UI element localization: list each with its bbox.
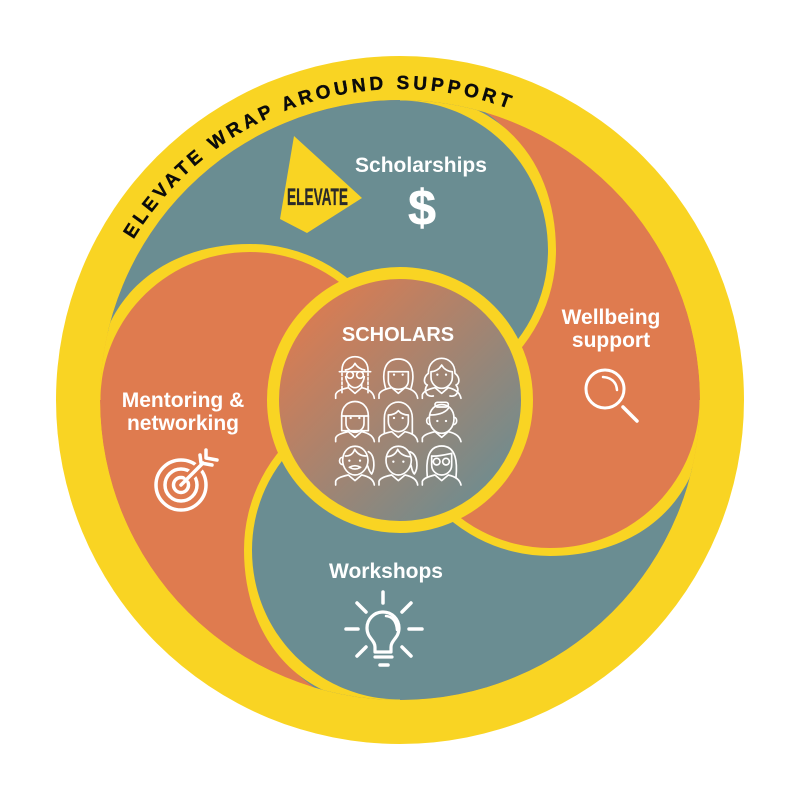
icon: light bulb [346,592,422,665]
scholar 4: bob with fringe [336,401,374,442]
panel: workshops swirl [252,461,692,700]
swirl border: bottom left [244,453,400,700]
panel: scholarships swirl [108,100,548,339]
scholar 6: hair bun [422,402,461,442]
label: wellbeing support: support [572,329,650,352]
scholar 7: side ponytail [336,446,374,485]
scholar 3: curly hair [422,358,461,398]
scholar 9: long hair and glasses [422,446,461,485]
label: workshops: Workshops [329,560,443,583]
curved title: ELEVATE WRAP AROUND SUPPORT [122,76,513,239]
label: wellbeing support: Wellbeing [562,306,660,329]
four swirl panels [100,100,700,700]
label: scholarships: Scholarships [355,154,487,177]
swirl border: bottom right [453,400,700,556]
scholar 1: braids and glasses [336,357,374,398]
label: mentoring and networking: networking [127,412,239,435]
central scholars circle [273,273,527,527]
outer yellow ring [56,56,744,744]
label: mentoring and networking: Mentoring & [122,389,244,412]
icon: magnifying glass [586,370,637,421]
scholar 8: ponytail [379,446,418,485]
icon: target with arrow [156,450,217,510]
scholar 5: long parted hair [379,402,418,442]
logo: elevate: ELEVATE [287,184,348,211]
swirl border: top left [100,244,347,400]
swirl border: top right [400,100,556,347]
logo: elevate [280,136,362,233]
icon: dollar sign: $ [408,180,436,236]
heading: scholars: SCHOLARS [342,324,454,346]
icon: group of nine scholars [336,357,461,485]
scholar 2: long straight hair [379,359,418,398]
panel: wellbeing and mentoring swirls [100,100,700,700]
